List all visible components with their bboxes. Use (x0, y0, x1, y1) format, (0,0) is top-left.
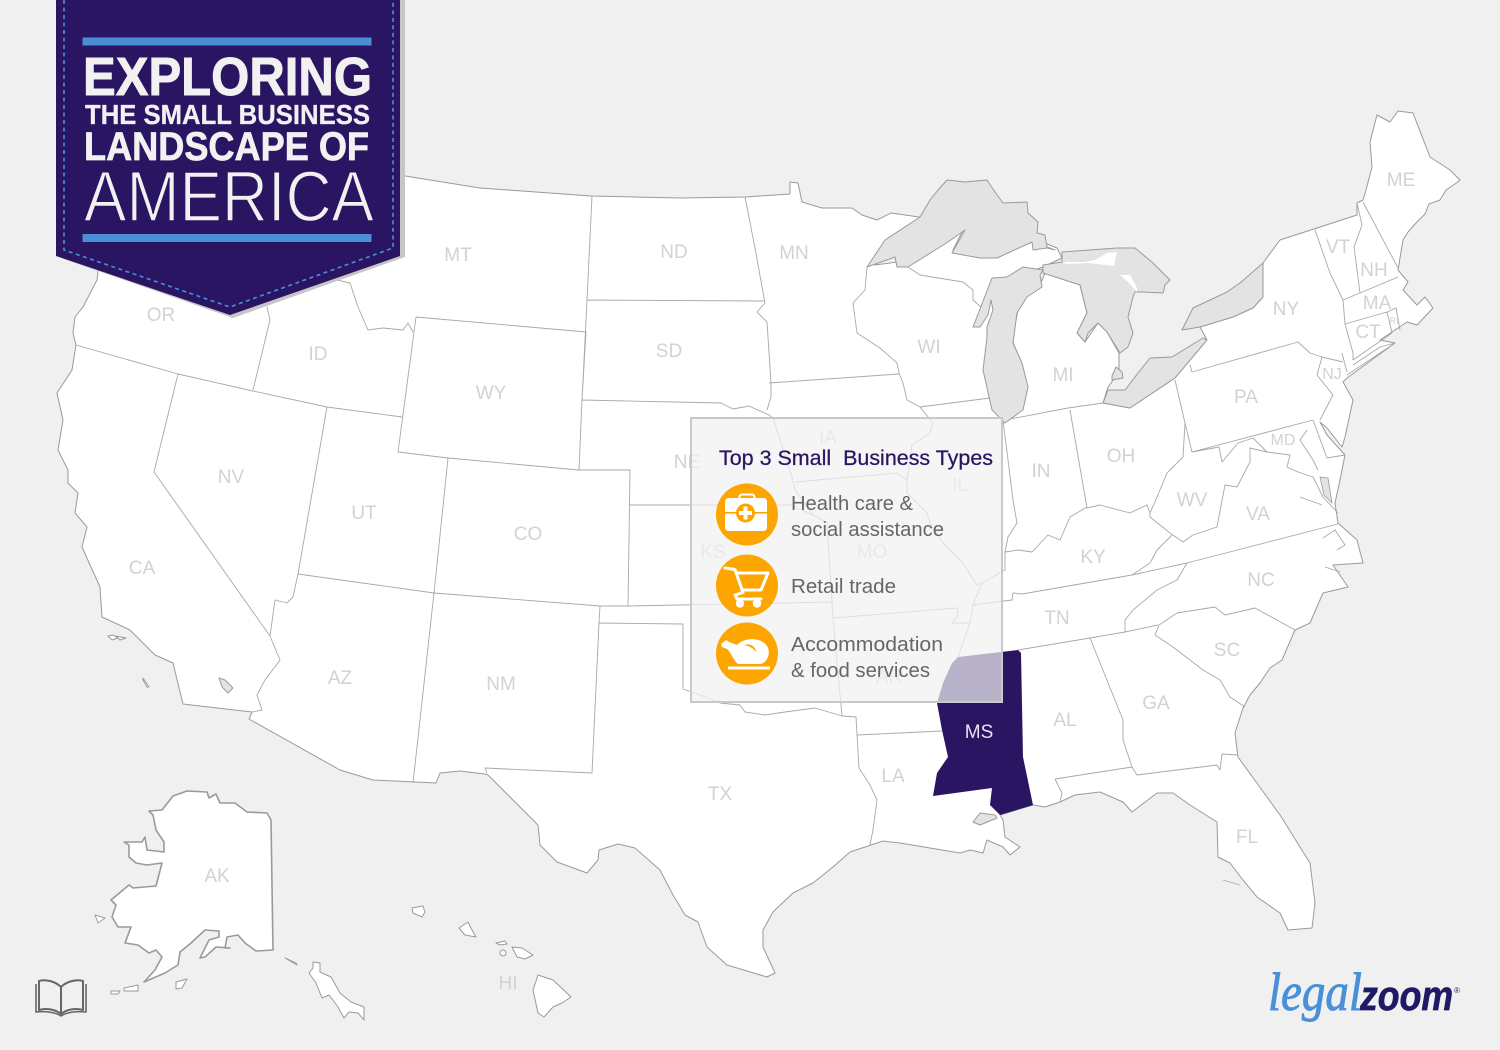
state labels: VT (1326, 237, 1351, 258)
state labels: MS (965, 722, 993, 743)
icon: shopping cart (716, 554, 778, 616)
callout panel: top 3 small business types (691, 418, 1002, 702)
state labels: WI (917, 337, 941, 358)
state labels: TN (1044, 608, 1070, 629)
state labels (129, 170, 1415, 994)
state labels: MN (779, 243, 809, 264)
state labels: AK (204, 866, 230, 887)
title banner: LANDSCAPE OF (84, 125, 369, 169)
state labels: UT (351, 503, 377, 524)
text: health care: Health care & (791, 493, 914, 515)
state labels: GA (1142, 693, 1170, 714)
state labels: OR (147, 305, 175, 326)
state labels: NH (1360, 260, 1388, 281)
lake superior (867, 180, 1055, 267)
map: Alaska (95, 791, 364, 1020)
state labels: MI (1052, 365, 1074, 386)
chesapeake bay (1320, 477, 1332, 503)
title banner (56, 0, 405, 318)
icon: roast turkey (716, 622, 778, 684)
state labels: AR (876, 667, 902, 688)
logo: legalzoom: ® (1454, 986, 1460, 995)
state labels: MO (857, 542, 887, 563)
map: Hawaii (412, 906, 571, 1017)
text: accommodation: Accommodation (791, 634, 943, 656)
state labels: FL (1236, 827, 1258, 848)
icon: open book (36, 980, 86, 1016)
state labels: LA (881, 766, 905, 787)
panel heading: Top 3 Small Business Types (719, 446, 993, 470)
map: contiguous United States (57, 111, 1460, 977)
state labels: PA (1234, 387, 1258, 408)
lake pontchartrain (973, 813, 997, 825)
logo: legalzoom: legal (1268, 962, 1362, 1022)
logo: legalzoom (1268, 962, 1460, 1022)
state labels: KY (1080, 547, 1106, 568)
state labels: IL (952, 475, 968, 496)
state labels: MD (1271, 432, 1295, 449)
state labels: ND (660, 242, 688, 263)
state labels: KS (700, 542, 726, 563)
state labels: SD (656, 341, 682, 362)
state: Mississippi highlighted (933, 650, 1033, 815)
california islands (108, 635, 149, 687)
state labels: NC (1247, 570, 1275, 591)
state labels: CT (1355, 322, 1381, 343)
lake michigan (973, 267, 1043, 423)
huron islands (1063, 252, 1137, 292)
lake erie (1103, 338, 1207, 408)
state labels: NE (674, 452, 700, 473)
state labels: SC (1214, 640, 1240, 661)
state labels: WY (476, 383, 507, 404)
state labels: CA (129, 558, 156, 579)
state labels: AL (1053, 710, 1077, 731)
state labels: WV (1177, 490, 1208, 511)
state labels: MA (1363, 293, 1392, 314)
state labels: RI (1390, 316, 1398, 326)
icon: medical kit (716, 484, 778, 546)
logo: legalzoom: zoom (1359, 972, 1453, 1019)
state labels: MT (444, 245, 472, 266)
state labels: IA (819, 428, 837, 449)
state labels: NM (486, 674, 516, 695)
state labels: VA (1246, 504, 1270, 525)
state labels: NV (218, 467, 245, 488)
state labels: IN (1032, 461, 1050, 482)
text: retail trade: Retail trade (791, 576, 896, 598)
title banner: AMERICA (84, 158, 375, 237)
callout panel: top 3 small business types: & food services (791, 660, 930, 682)
state labels: NJ (1322, 366, 1342, 383)
lake st clair (1112, 367, 1123, 380)
state labels: HI (498, 973, 518, 994)
state labels: AZ (328, 668, 353, 689)
state labels: ID (308, 344, 328, 365)
callout panel: top 3 small business types: social assistance (791, 519, 944, 541)
state labels: CO (514, 524, 542, 545)
title text: EXPLORING (83, 47, 372, 107)
state labels: ME (1387, 170, 1415, 191)
state labels: TX (708, 784, 732, 805)
state labels: OH (1107, 446, 1135, 467)
lake ontario (1182, 263, 1263, 330)
title banner: THE SMALL BUSINESS (85, 99, 370, 130)
state labels: NY (1273, 299, 1300, 320)
lake huron (1043, 248, 1170, 353)
salton sea (219, 678, 233, 693)
